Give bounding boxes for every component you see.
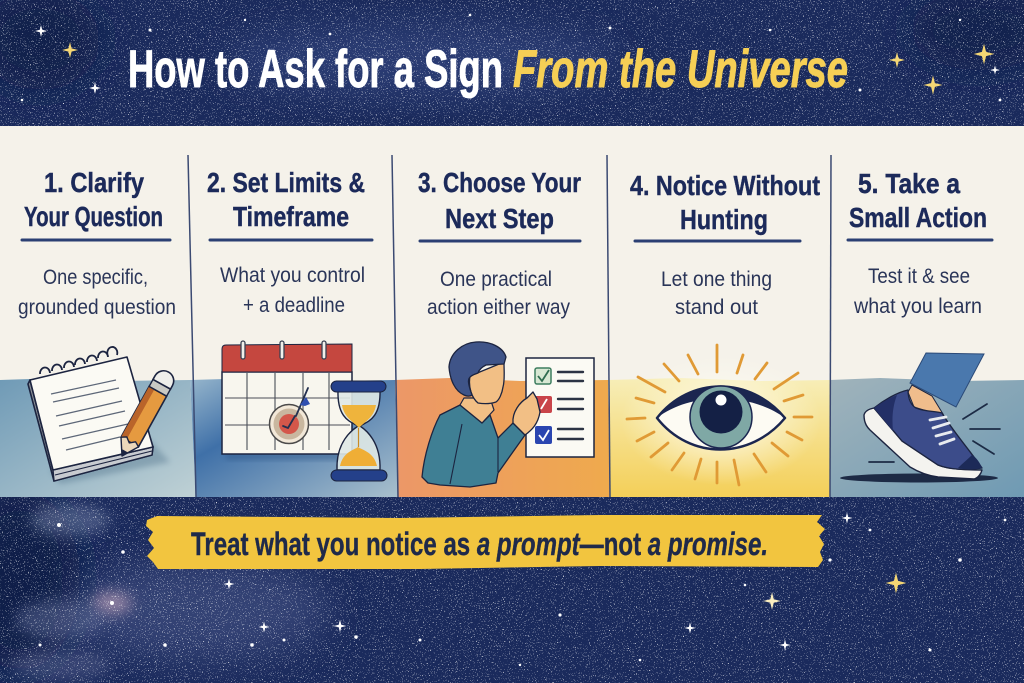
icon: calendar with target — [222, 341, 352, 460]
panel 3: choose your next step — [395, 167, 610, 497]
description 2 — [220, 264, 365, 317]
icon: checklist — [526, 358, 594, 457]
heading 2: Timeframe — [233, 201, 349, 232]
description 3: action either way — [427, 296, 570, 319]
title: From the Universe — [513, 40, 848, 99]
heading 5 — [849, 168, 987, 233]
icon: notebook and pencil — [28, 347, 177, 484]
heading 3: 3. Choose Your — [418, 167, 581, 198]
icon: eye with rays — [627, 345, 812, 485]
heading 5: 5. Take a — [858, 168, 960, 199]
description 1: grounded question — [18, 296, 176, 319]
description 5 — [853, 265, 982, 318]
description 5: what you learn — [853, 295, 982, 318]
heading 2: 2. Set Limits & — [207, 167, 365, 198]
heading 4: Hunting — [680, 204, 768, 235]
description 5: Test it & see — [868, 265, 970, 288]
icon: person pointing — [422, 342, 540, 487]
description 1: One specific, — [43, 266, 148, 289]
description 4 — [661, 268, 772, 319]
heading 2 — [207, 167, 365, 232]
panel dividers — [188, 155, 831, 497]
yellow banner — [146, 515, 825, 569]
heading 3 — [418, 167, 581, 234]
heading 4: 4. Notice Without — [630, 170, 820, 201]
description 2: + a deadline — [243, 294, 345, 317]
heading 5: Small Action — [849, 202, 987, 233]
heading 1: 1. Clarify — [44, 167, 144, 198]
title: How to Ask for a Sign — [128, 40, 503, 99]
heading 1 — [24, 167, 163, 232]
description 4: stand out — [675, 296, 758, 319]
panel 1: clarify your question — [0, 167, 196, 497]
panel 2: set limits and timeframe — [190, 167, 398, 497]
description 4: Let one thing — [661, 268, 772, 291]
description 1 — [18, 266, 176, 319]
pencil — [113, 367, 177, 461]
heading 1: Your Question — [24, 201, 163, 232]
banner text: Treat what you notice as a prompt—not a promise. — [191, 526, 768, 562]
panel 5: take a small action — [830, 168, 1024, 497]
heading 4 — [630, 170, 820, 235]
heading 3: Next Step — [445, 203, 554, 234]
cream steps strip — [0, 126, 1024, 497]
panel 4: notice without hunting — [608, 170, 830, 497]
description 3: One practical — [440, 268, 552, 291]
icon: walking shoe — [840, 353, 1000, 482]
description 3 — [427, 268, 570, 319]
description 2: What you control — [220, 264, 365, 287]
icon: hourglass — [331, 381, 387, 481]
